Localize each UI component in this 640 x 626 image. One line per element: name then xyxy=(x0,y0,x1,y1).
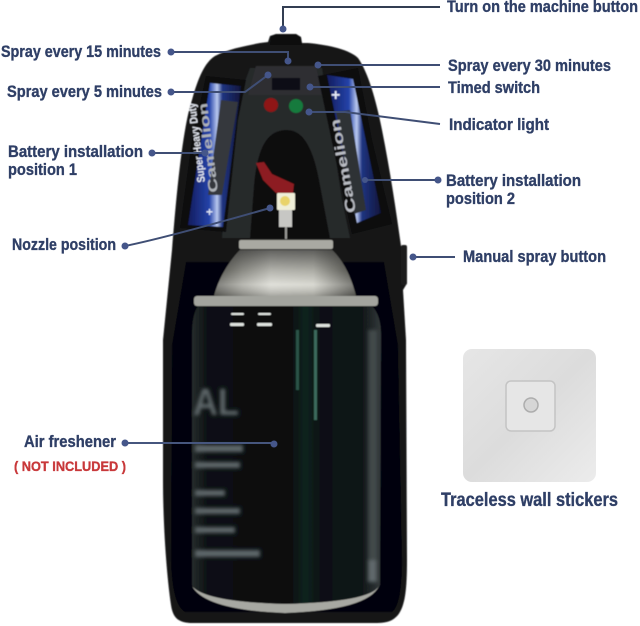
indicator LED green xyxy=(289,99,303,113)
switch slot xyxy=(272,78,300,90)
label: spray every 5 minutes: Spray every 5 minutes xyxy=(7,82,162,101)
label: manual spray button: Manual spray button xyxy=(463,247,606,266)
callout lines xyxy=(125,7,455,443)
line: machine button xyxy=(283,7,440,29)
label: nozzle position: Nozzle position xyxy=(12,235,116,254)
red actuator xyxy=(256,162,294,193)
label: timed switch: Timed switch xyxy=(448,78,540,97)
label: battery installation position 2: position 2 xyxy=(446,189,515,208)
battery compartment right xyxy=(318,68,392,234)
timed switch panel xyxy=(248,66,322,95)
line: nozzle xyxy=(125,208,270,246)
traceless wall sticker xyxy=(463,349,596,482)
aerosol can xyxy=(192,240,381,613)
device body xyxy=(163,34,407,623)
label: battery installation position 1 xyxy=(8,142,143,179)
indicator LED red xyxy=(264,98,278,112)
callout dots xyxy=(122,26,442,448)
label: spray every 30 minutes: Spray every 30 minutes xyxy=(448,56,611,75)
line: air freshener xyxy=(125,442,274,444)
manual spray button xyxy=(401,245,407,285)
line: 30 minutes xyxy=(318,64,440,66)
label: indicator light: Indicator light xyxy=(449,115,549,134)
battery 2 xyxy=(327,75,381,223)
line: timed switch xyxy=(310,86,440,88)
line: battery 1 xyxy=(152,152,205,154)
line: 15 minutes xyxy=(171,52,288,61)
battery compartment left xyxy=(180,76,246,232)
line: battery 2 xyxy=(365,179,438,181)
label: air freshener: Air freshener xyxy=(24,432,116,451)
air freshener device xyxy=(163,34,407,623)
machine button xyxy=(270,34,302,45)
battery 1: Super Heavy Duty xyxy=(186,101,208,183)
label: not included: ( NOT INCLUDED ) xyxy=(14,458,126,474)
battery 1: + xyxy=(206,205,213,219)
arch opening xyxy=(250,130,330,238)
inner lower cavity xyxy=(171,262,402,612)
label: battery installation position 2: Battery installation xyxy=(446,171,581,190)
battery 2: Camelion xyxy=(327,118,359,214)
can blurred label: AL xyxy=(193,382,239,424)
label: traceless wall stickers: Traceless wall stickers xyxy=(441,490,618,511)
center console xyxy=(222,68,350,238)
battery 1: Camelion xyxy=(195,102,221,193)
line: manual spray xyxy=(413,256,455,258)
sticker hook plate xyxy=(506,381,555,431)
line: indicator xyxy=(309,112,440,124)
label: spray every 15 minutes: Spray every 15 minutes xyxy=(1,42,161,61)
battery 1 xyxy=(186,83,241,227)
nozzle xyxy=(277,193,295,239)
can highlights xyxy=(230,313,330,420)
line: 5 minutes xyxy=(171,75,268,92)
can blurred label xyxy=(193,330,377,582)
label: battery installation position 1: position 1 xyxy=(8,160,77,179)
battery 2: + xyxy=(331,87,340,104)
sticker hook xyxy=(524,398,538,412)
label: battery installation position 1: Battery installation xyxy=(8,142,143,161)
label: battery installation position 2 xyxy=(446,171,581,208)
